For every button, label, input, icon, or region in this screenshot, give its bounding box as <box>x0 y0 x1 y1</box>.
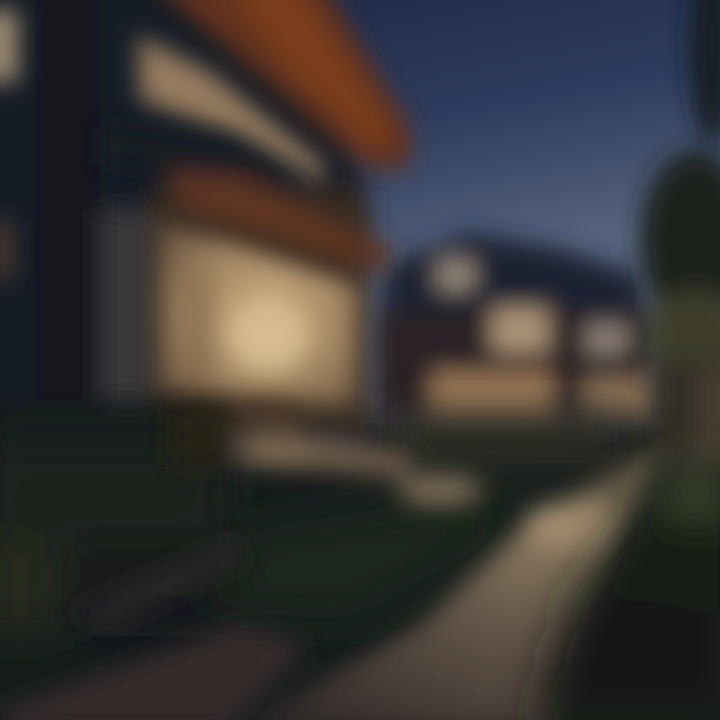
distant windows <box>432 260 664 416</box>
garden and ground <box>0 415 630 630</box>
ground base <box>0 420 720 720</box>
sky <box>0 0 720 460</box>
lit terrace <box>170 405 482 506</box>
upper window band <box>0 10 325 280</box>
lower roof overhang <box>100 125 392 272</box>
distant house <box>375 232 664 430</box>
right bushes <box>530 470 720 720</box>
upper roof overhang <box>150 0 412 170</box>
main house dark wall <box>0 0 370 480</box>
walkway <box>0 455 660 720</box>
right tree <box>640 0 720 470</box>
large lit window <box>158 222 358 408</box>
